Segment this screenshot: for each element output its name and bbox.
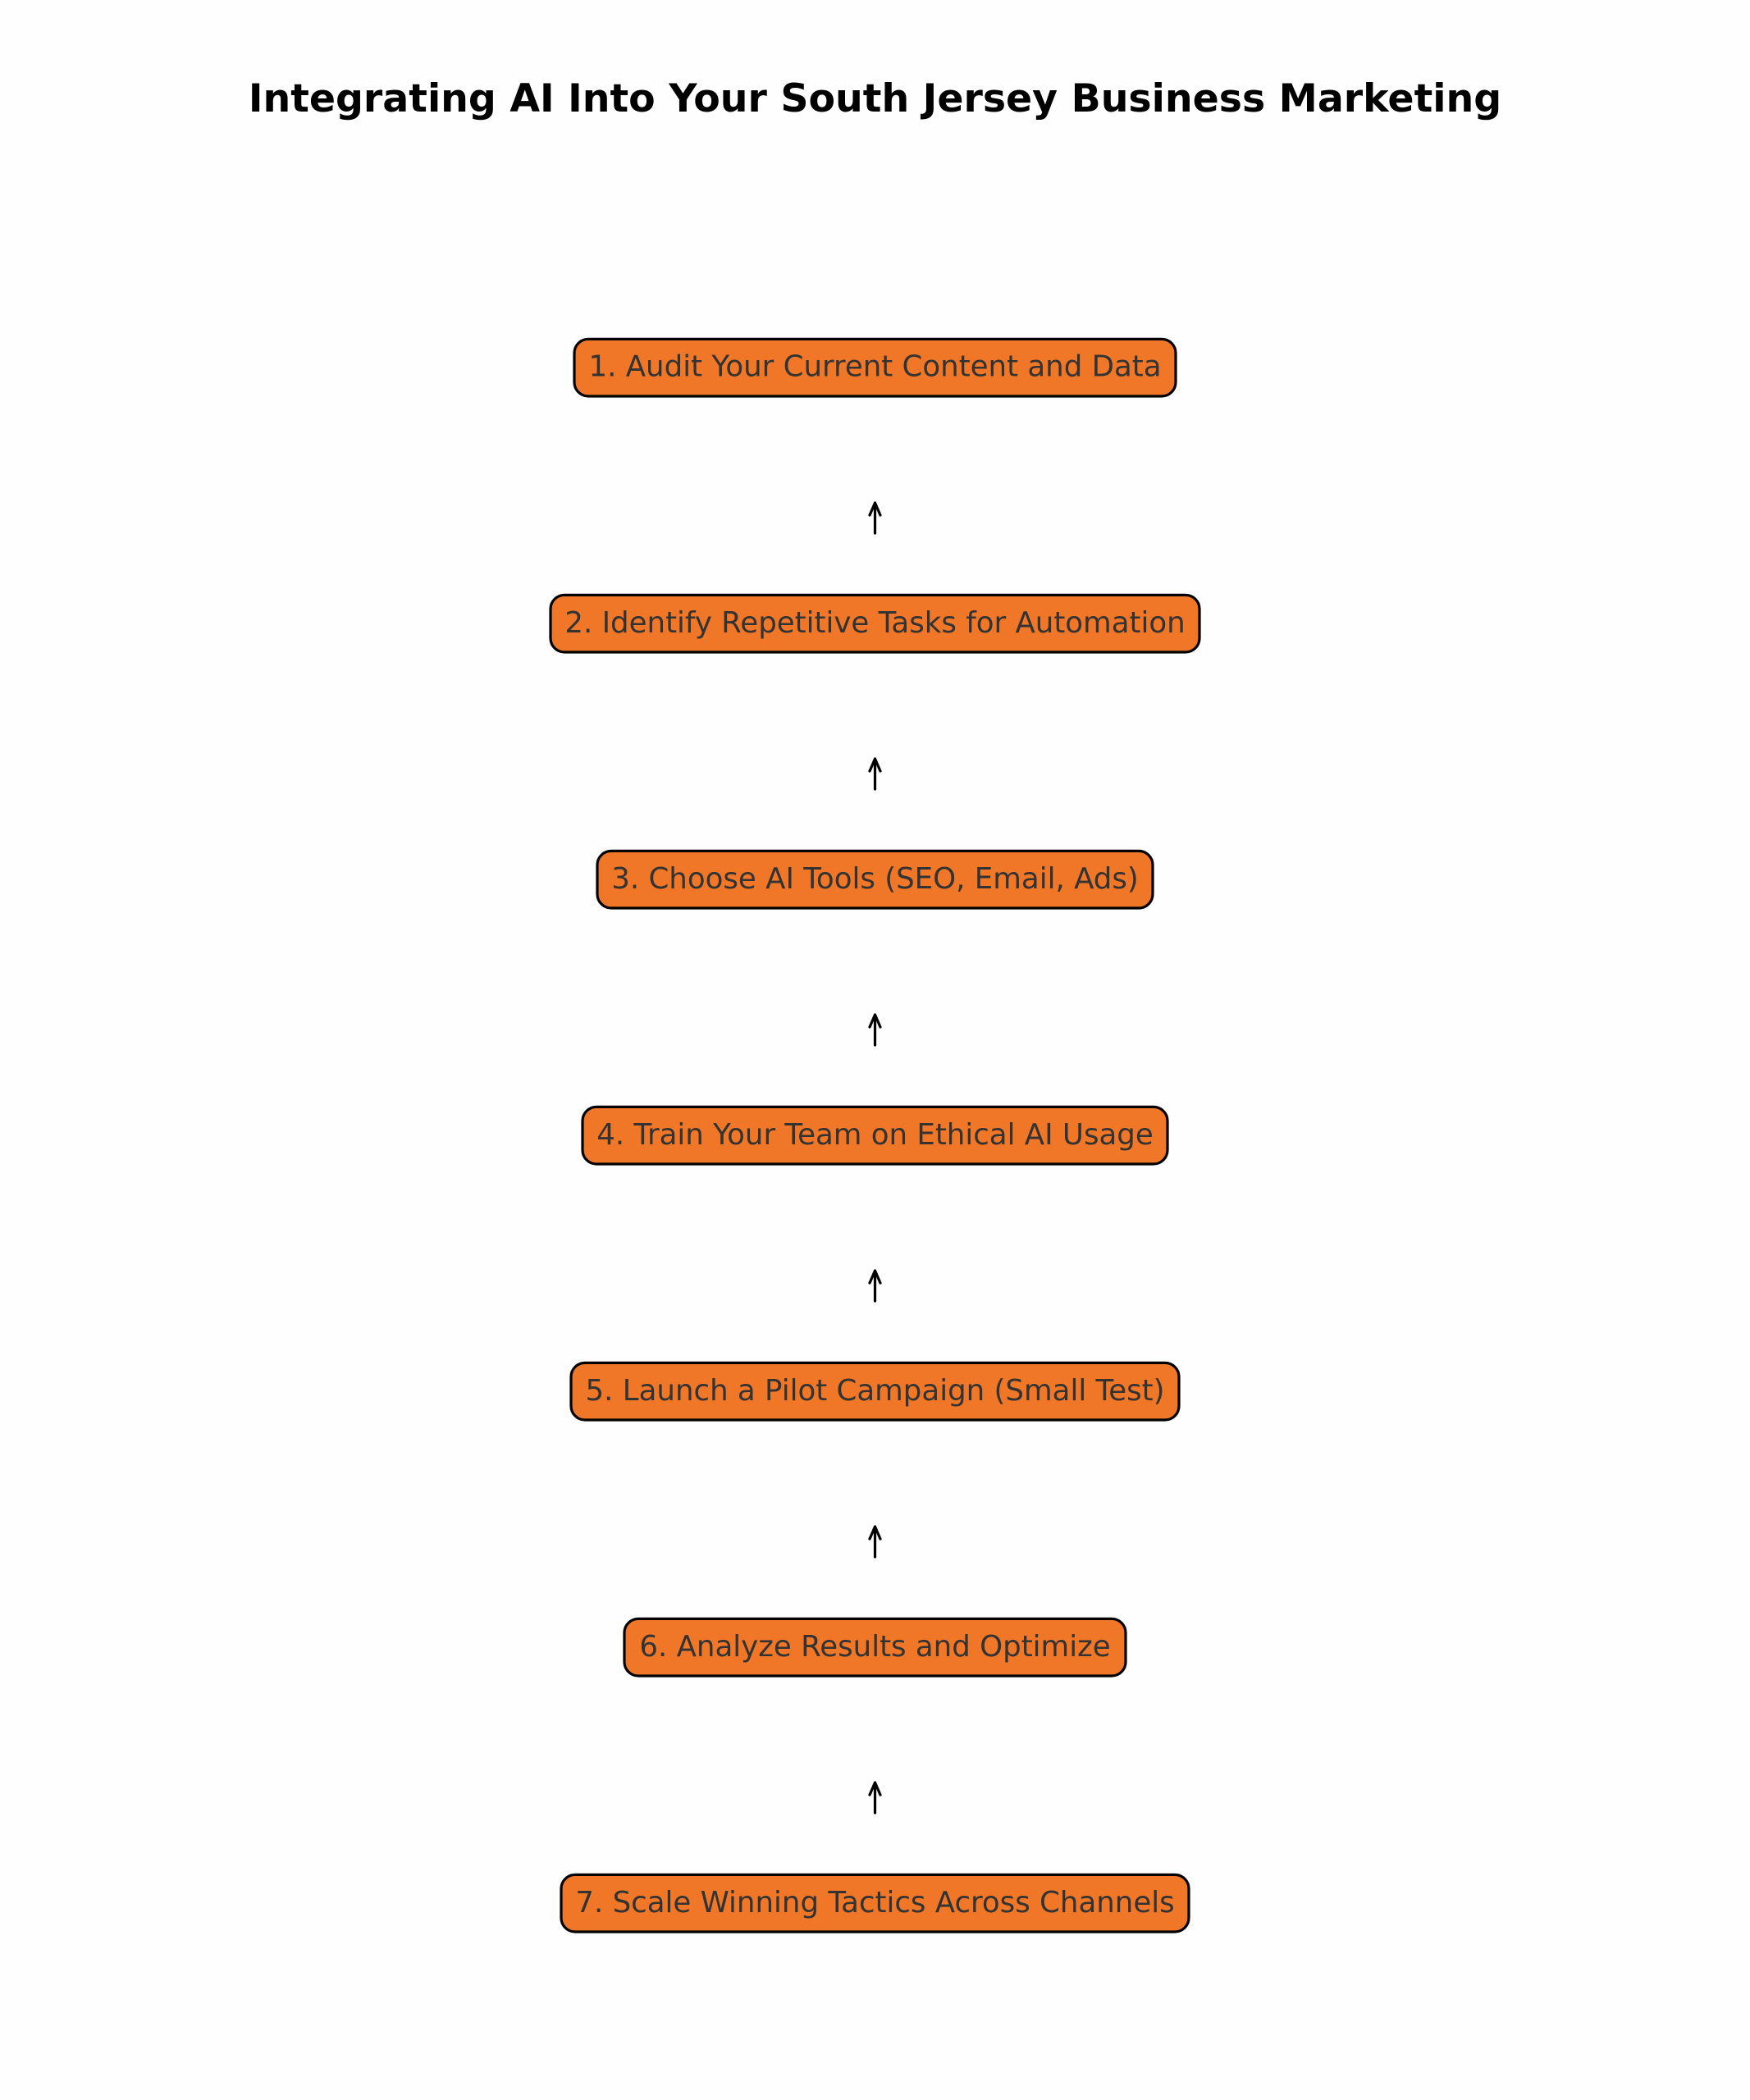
step 7 — [561, 1874, 1189, 1932]
step 6 — [624, 1618, 1126, 1676]
step 1: 1. Audit Your Current Content and Data — [588, 349, 1162, 384]
arrow: step 6 to step 5 — [870, 1527, 880, 1557]
step 5: 5. Launch a Pilot Campaign (Small Test) — [586, 1374, 1164, 1408]
step 7: 7. Scale Winning Tactics Across Channels — [575, 1886, 1175, 1920]
arrow: step 4 to step 3 — [870, 1015, 880, 1045]
arrow: step 2 to step 1 — [870, 503, 880, 533]
arrow: step 7 to step 6 — [870, 1783, 880, 1813]
step 2 — [551, 595, 1199, 652]
step 4 — [583, 1107, 1167, 1164]
arrow: step 5 to step 4 — [870, 1271, 880, 1301]
title: Integrating AI Into Your South Jersey Business Marketing — [249, 76, 1501, 121]
step 3 — [597, 851, 1153, 908]
arrow: step 3 to step 2 — [870, 759, 880, 789]
step 6: 6. Analyze Results and Optimize — [639, 1630, 1111, 1664]
step 1 — [574, 339, 1176, 396]
step 5 — [571, 1363, 1179, 1420]
step 4: 4. Train Your Team on Ethical AI Usage — [596, 1118, 1154, 1152]
step 2: 2. Identify Repetitive Tasks for Automation — [564, 606, 1186, 640]
step 3: 3. Choose AI Tools (SEO, Email, Ads) — [611, 862, 1139, 896]
